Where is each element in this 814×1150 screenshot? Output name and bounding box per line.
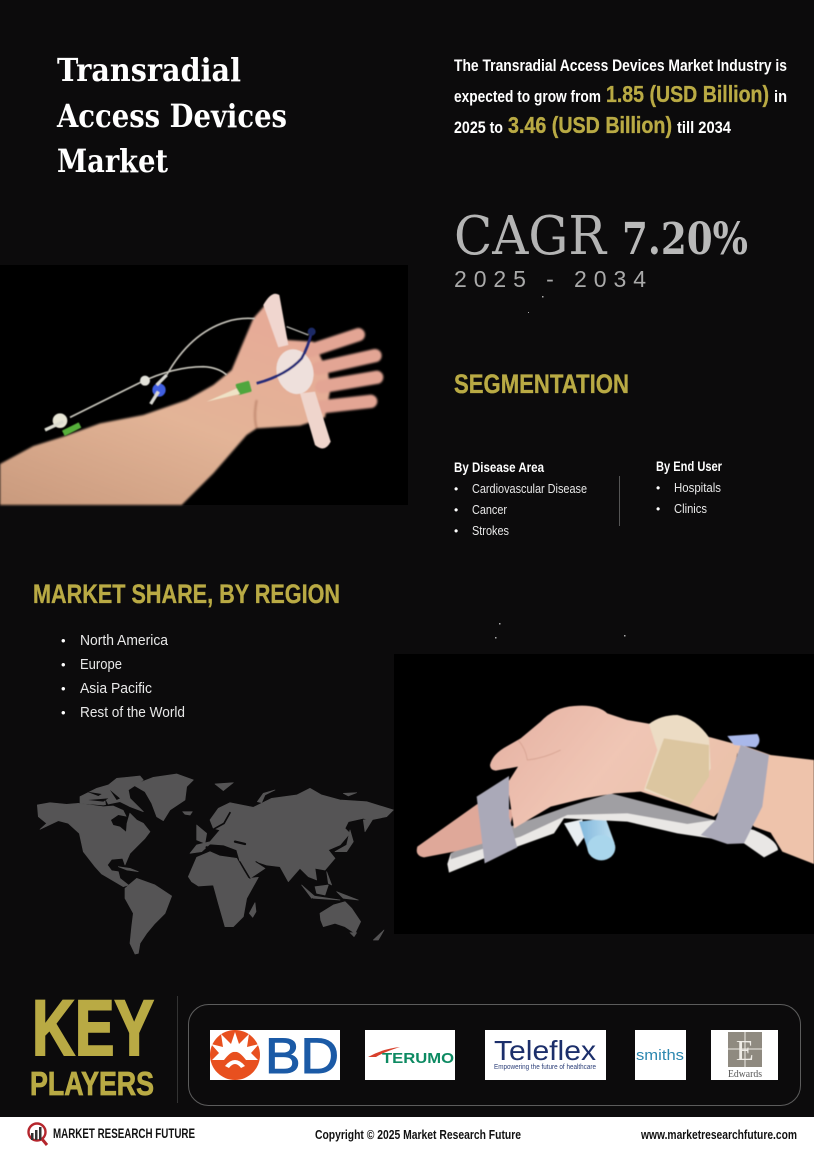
key players heading: KEY — [32, 983, 154, 1072]
logo: Teleflex — [485, 1030, 606, 1080]
straps — [477, 776, 517, 863]
region list: Europe — [80, 656, 122, 673]
forearm — [737, 743, 814, 864]
CAGR: 2025 - 2034 — [454, 266, 646, 292]
title — [56, 51, 287, 180]
icon: market research future logo — [28, 1124, 47, 1145]
palm and thumb — [490, 706, 739, 828]
region list: North America — [80, 632, 169, 649]
key players panel — [188, 1004, 800, 1106]
region list: • — [61, 681, 66, 696]
segmentation: by disease area — [454, 460, 587, 538]
region list: Asia Pacific — [80, 680, 152, 697]
logo: Edwards — [711, 1030, 778, 1080]
segmentation: by end user — [656, 459, 723, 516]
logo: Terumo: TERUMO — [382, 1050, 454, 1067]
CAGR: CAGR — [454, 206, 608, 267]
logo: Teleflex: Teleflex — [494, 1035, 596, 1066]
dressing and tubing — [45, 294, 331, 448]
segmentation: by disease area: • — [454, 482, 458, 496]
logo: Smiths — [635, 1030, 686, 1080]
CAGR — [454, 206, 748, 292]
segmentation heading: SEGMENTATION — [454, 369, 629, 399]
segmentation: by disease area: Strokes — [472, 523, 509, 538]
splint — [447, 805, 778, 873]
logo: Smiths: smiths — [636, 1047, 684, 1064]
intro text: 1.85 (USD Billion) — [606, 81, 769, 107]
intro text: expected to grow from — [454, 87, 601, 106]
segmentation: by end user: Hospitals — [674, 480, 721, 495]
footer: MARKET RESEARCH FUTURE — [53, 1126, 195, 1141]
segmentation: by end user: Clinics — [674, 501, 707, 516]
logo: BD: BD — [265, 1028, 339, 1084]
market share heading: MARKET SHARE, BY REGION — [33, 579, 340, 609]
title: Access Devices — [56, 97, 287, 135]
segmentation: by disease area: By Disease Area — [454, 460, 544, 475]
segmentation: by disease area: • — [454, 524, 458, 538]
region list: Rest of the World — [80, 704, 185, 721]
segmentation: by disease area: Cancer — [472, 502, 508, 517]
CAGR: 7.20% — [622, 214, 748, 265]
segmentation: by end user: • — [656, 502, 660, 516]
logo: Edwards: E — [736, 1035, 754, 1067]
photo: arm with radial access sheath — [0, 265, 408, 505]
logo: Terumo — [365, 1030, 455, 1080]
fingers — [417, 804, 514, 857]
intro text: 2025 to — [454, 118, 503, 137]
title: Market — [57, 142, 168, 180]
syringe — [564, 819, 585, 847]
logo: BD — [210, 1028, 340, 1084]
region list: • — [61, 705, 66, 720]
intro text: in — [774, 87, 787, 106]
region list — [61, 632, 185, 721]
region list: • — [61, 633, 66, 648]
intro text — [454, 56, 787, 138]
intro text: till 2034 — [677, 118, 731, 137]
segmentation: by end user: By End User — [656, 459, 723, 474]
key players heading — [30, 983, 154, 1102]
logo: Edwards: Edwards — [728, 1068, 762, 1080]
logo: Teleflex: Empowering the future of healthcare — [494, 1064, 596, 1071]
segmentation: by disease area: Cardiovascular Disease — [472, 481, 587, 496]
photo: hand in wrist compression splint — [394, 654, 814, 934]
intro text: 3.46 (USD Billion) — [508, 112, 672, 138]
footer: Copyright © 2025 Market Research Future — [315, 1127, 521, 1142]
segmentation: by end user: • — [656, 481, 660, 495]
bandage — [644, 715, 711, 807]
key players heading: PLAYERS — [30, 1065, 154, 1102]
region list: • — [61, 657, 66, 672]
title: Transradial — [57, 51, 241, 89]
arm and palm — [0, 303, 377, 505]
tiny specks — [495, 296, 626, 638]
world map — [37, 774, 393, 954]
footer — [0, 1117, 814, 1150]
segmentation: by disease area: • — [454, 503, 458, 517]
